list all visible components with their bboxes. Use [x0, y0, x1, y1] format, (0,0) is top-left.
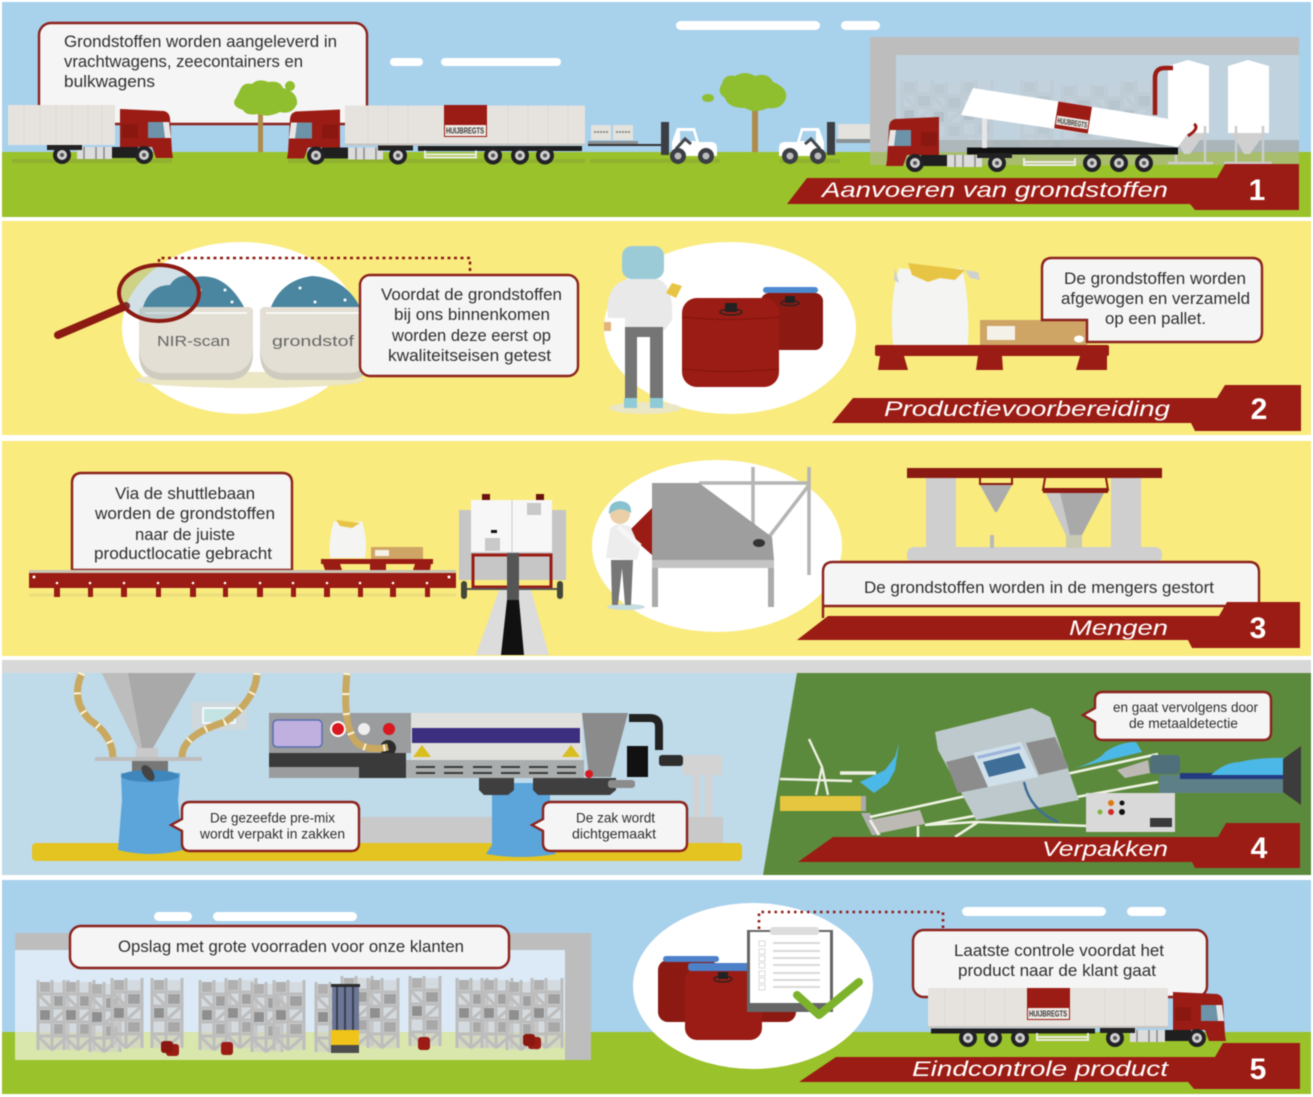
- callout: laatste controle: Laatste controle voordat het: [954, 941, 1164, 960]
- callout: metaaldetectie: de metaaldetectie: [1129, 715, 1238, 731]
- panel: verpakken: [2, 660, 1311, 875]
- banner: eindcontrole product, 5: 5: [1250, 1053, 1266, 1086]
- banner: aanvoeren van grondstoffen, 1: Aanvoeren van grondstoffen: [819, 179, 1168, 202]
- icon: small drum 4: [523, 1034, 541, 1049]
- pallet with bag and box: [875, 263, 1109, 370]
- callout: gezeefde pre-mix: De gezeefde pre-mix: [210, 810, 335, 826]
- callout: laatste controle: product naar de klant gaat: [958, 961, 1156, 980]
- truck: middle tilted left: [287, 105, 585, 164]
- callout: NIR-scan: Voordat de grondstoffen: [381, 285, 562, 304]
- pallet with boxes and fork: [588, 125, 664, 146]
- callout: afwegen: De grondstoffen worden: [1064, 269, 1246, 288]
- callout: metaaldetectie: en gaat vervolgens door: [1113, 699, 1258, 715]
- callout: afwegen: op een pallet.: [1105, 309, 1206, 328]
- dotted connector: [759, 912, 943, 930]
- filling hopper with tubes: [78, 673, 257, 772]
- callout: afwegen: [1042, 258, 1262, 342]
- circle: operator en vaten: [604, 242, 856, 414]
- pallet on conveyor: [321, 520, 433, 570]
- callout: shuttlebaan: worden de grondstoffen: [94, 504, 275, 523]
- callout: NIR-scan: bij ons binnenkomen: [394, 305, 550, 324]
- callout: mengers: De grondstoffen worden in de mengers gestort: [864, 578, 1214, 597]
- callout: NIR-scan: kwaliteitseisen getest: [388, 346, 551, 365]
- callout: shuttlebaan: [72, 473, 292, 570]
- banner: eindcontrole product, 5: [799, 1043, 1300, 1089]
- truck: tipper with raised trailer: HUIJBREGTS: [1057, 116, 1088, 130]
- banner: verpakken, 4: 4: [1251, 832, 1268, 865]
- circle: operator bij mengtrechter: [592, 460, 842, 632]
- banner: productievoorbereiding, 2: [832, 385, 1301, 431]
- callout: aanlevering: Grondstoffen worden aangeleverd in: [64, 32, 337, 51]
- bag guide and yellow bar: [780, 739, 899, 811]
- icon: check mark: [797, 982, 859, 1015]
- icon: tree left: [234, 80, 297, 152]
- icon: small drum 2: [221, 1042, 233, 1055]
- banner: eindcontrole product, 5: Eindcontrole product: [912, 1058, 1170, 1081]
- callout: opslag: [70, 926, 509, 968]
- banner: verpakken, 4: [798, 823, 1300, 868]
- banner: productievoorbereiding, 2: 2: [1251, 393, 1267, 426]
- callout: aanlevering: bulkwagens: [64, 72, 155, 91]
- icon: forklift left: [661, 122, 717, 164]
- bags: NIR-scan en grondstof: NIR-scan: [157, 333, 230, 350]
- icon: yellow shuttle: [331, 984, 360, 1053]
- truck: final: [928, 988, 1226, 1047]
- callout: metaaldetectie: [1083, 692, 1271, 740]
- truck: final: HUIJBREGTS: [1029, 1010, 1067, 1018]
- pallet behind forklift: [836, 124, 872, 143]
- callout: shuttlebaan: Via de shuttlebaan: [115, 484, 255, 503]
- bags: NIR-scan en grondstof: [135, 276, 372, 388]
- callout: aanlevering: vrachtwagens, zeecontainers en: [64, 52, 303, 71]
- metal detector: [935, 708, 1079, 822]
- icons: small drums: [161, 1041, 179, 1056]
- clouds: [390, 21, 880, 66]
- icon: magnifier: [58, 265, 199, 335]
- banner: verpakken, 4: Verpakken: [1042, 838, 1168, 861]
- banner: mengen, 3: Mengen: [1069, 617, 1168, 640]
- screen on wall: [191, 702, 247, 730]
- banner: aanvoeren van grondstoffen, 1: [787, 164, 1299, 210]
- dotted connector: [159, 258, 470, 272]
- callout: opslag: Opslag met grote voorraden voor onze klanten: [118, 937, 464, 956]
- figure: operator mengen: [606, 501, 645, 610]
- building with racks: [870, 37, 1299, 165]
- callout: dichtgemaakt: dichtgemaakt: [572, 826, 656, 842]
- blue powder behind scanner: [1075, 742, 1142, 768]
- panel: mengen: [2, 441, 1311, 656]
- callout: NIR-scan: worden deze eerst op: [391, 326, 551, 345]
- sealing machine: [269, 673, 683, 795]
- circle: eindcontrole: [633, 903, 873, 1069]
- silos: [1155, 60, 1272, 163]
- panel: aanvoeren van grondstoffen: [2, 2, 1311, 217]
- racks: [38, 976, 562, 1052]
- circle: NIR-scan: [122, 242, 360, 414]
- control box: [1086, 793, 1175, 832]
- icon: clipboard: [747, 927, 833, 1012]
- panel: eindcontrole product: [2, 880, 1311, 1094]
- callout: afwegen: afgewogen en verzameld: [1061, 289, 1250, 308]
- icon: drums: [658, 956, 796, 1040]
- conveyor: shuttlebaan: [29, 570, 456, 597]
- callout: dichtgemaakt: [532, 802, 687, 851]
- icon: small drum 3: [418, 1037, 430, 1050]
- icon: forklift right: [779, 122, 835, 164]
- callout: shuttlebaan: productlocatie gebracht: [94, 544, 272, 563]
- callout: dichtgemaakt: De zak wordt: [576, 810, 655, 826]
- panel: productievoorbereiding: [2, 221, 1311, 435]
- floor: [32, 843, 742, 861]
- bag: dichtmaken: [486, 783, 556, 857]
- callout: laatste controle: [913, 930, 1207, 997]
- callout: shuttlebaan: naar de juiste: [135, 525, 235, 544]
- truck: middle tilted left: HUIJBREGTS: [446, 126, 484, 136]
- bags: NIR-scan en grondstof: grondstof: [272, 333, 355, 350]
- icon: red drums: [682, 287, 823, 387]
- floor track: [476, 590, 549, 655]
- callout: NIR-scan: [360, 275, 578, 376]
- banner: aanvoeren van grondstoffen, 1: 1: [1249, 174, 1265, 207]
- conveyor metal detection: [861, 754, 1158, 837]
- truck: left trailer with cab: [8, 105, 173, 164]
- mixers: [907, 468, 1162, 563]
- callout: gezeefde pre-mix: wordt verpakt in zakken: [199, 826, 345, 842]
- callout: mengers: [823, 562, 1259, 618]
- warehouse: [15, 933, 591, 1060]
- clouds: [154, 907, 1166, 921]
- figure: operator: [604, 246, 682, 414]
- icon: tree right: [702, 73, 786, 152]
- hopper with scaffold: [627, 467, 809, 607]
- bag: verpakken: [118, 763, 183, 854]
- shuttle cart: [459, 494, 566, 600]
- callout: aanlevering: [39, 23, 367, 124]
- banner: productievoorbereiding, 2: Productievoorbereiding: [884, 398, 1170, 421]
- background post and base: [361, 755, 723, 843]
- banner: mengen, 3: 3: [1250, 612, 1266, 645]
- callout: gezeefde pre-mix: [171, 802, 359, 851]
- truck: tipper with raised trailer: [886, 88, 1196, 172]
- outfeed section: [1150, 746, 1301, 805]
- banner: mengen, 3: [797, 602, 1300, 648]
